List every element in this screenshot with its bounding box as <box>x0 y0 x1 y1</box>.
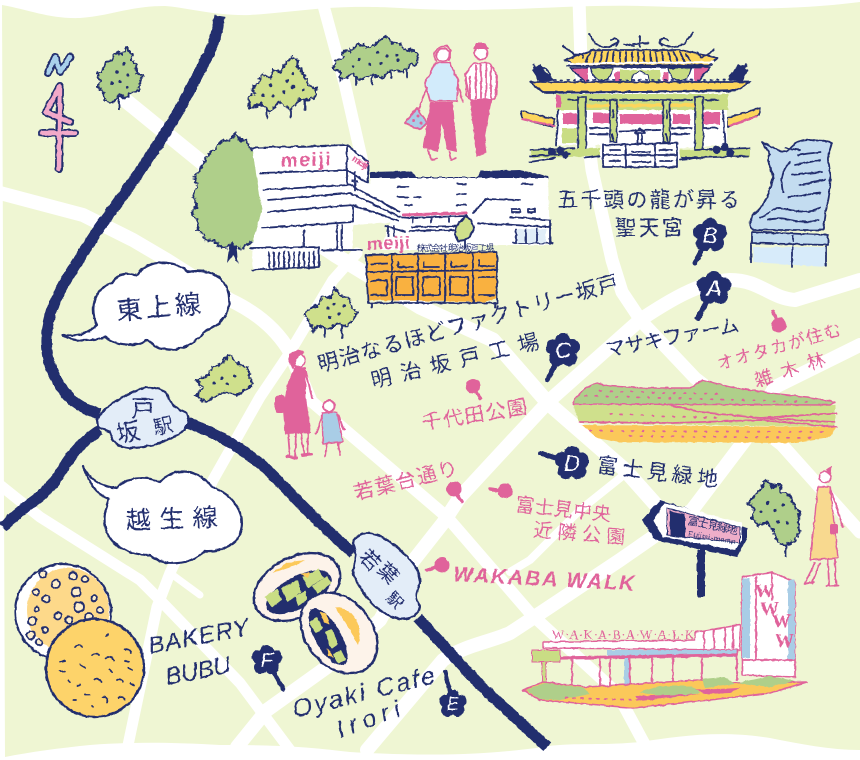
temple: Seitengu <box>521 32 760 167</box>
man with hat <box>465 43 497 157</box>
compass: north arrow <box>42 57 75 169</box>
marker F <box>252 645 283 689</box>
station: Sakado: 戸 <box>131 396 155 423</box>
pink pin: Wakaba Walk <box>427 558 450 572</box>
marker E: E <box>447 694 460 714</box>
station: Sakado: 坂 <box>114 418 143 449</box>
station: Sakado <box>97 387 188 449</box>
label: Fujimi chuo: 富士見中央 <box>514 494 612 526</box>
building name: W·A·K·A·B·A·W·A·L·K <box>552 627 695 642</box>
right building <box>370 170 552 245</box>
orange factory panel <box>366 252 497 308</box>
illustration: parents and child <box>275 350 344 458</box>
tree 3 <box>333 36 418 85</box>
woman with bag <box>405 46 463 160</box>
callout: Ogose Line <box>83 466 242 563</box>
temple wall and columns <box>556 93 728 160</box>
callout: Tojo Line <box>63 263 229 350</box>
station: Wakaba: 葉 <box>372 558 403 589</box>
label: Fujimi green area: 富士見緑地 <box>595 454 719 492</box>
temple lower roof <box>530 80 750 93</box>
railway lines <box>3 16 547 747</box>
couple walking <box>405 43 497 160</box>
small tree in factory <box>455 215 474 248</box>
tree 2 <box>248 57 316 118</box>
meiji sign side: meiji <box>349 153 371 172</box>
main meiji block <box>250 145 405 270</box>
station: Sakado: 駅 <box>151 414 175 440</box>
signboard: Fujimi green area <box>642 500 747 597</box>
tree 7 <box>196 355 253 402</box>
label: neighborhood park: 近隣公園 <box>533 519 626 549</box>
illustration: round bread top <box>15 564 111 660</box>
marker C <box>546 333 580 380</box>
illustration: woodland field <box>573 380 837 443</box>
pink pin: Wakabadai street <box>446 482 462 502</box>
temple upper frieze <box>570 67 710 83</box>
marker C: C <box>555 338 571 363</box>
stone dragon lion statue <box>750 140 832 267</box>
marker E <box>440 672 466 716</box>
station: Wakaba: 駅 <box>382 589 406 613</box>
label: Irori: Irori <box>333 695 405 744</box>
ground <box>523 676 807 708</box>
illustration: round bread bottom <box>46 619 144 717</box>
label: Oyaki Cafe: Oyaki Cafe <box>290 661 438 724</box>
child <box>316 400 344 456</box>
label: Masaki Farm: マサキファーム <box>604 314 741 362</box>
pink pin: woodland <box>772 311 786 332</box>
station: Wakaba <box>353 533 420 619</box>
tower: W <box>755 581 774 602</box>
tower: W <box>760 599 779 620</box>
marker B: B <box>703 223 717 248</box>
marker D <box>540 446 589 479</box>
signboard: Fujimi green area: 富士見緑地 <box>686 514 739 538</box>
label: five thousand dragons: 五千頭の龍が昇る <box>557 189 740 212</box>
label: Wakaba Walk: WAKABA WALK <box>453 563 637 596</box>
temple base <box>530 143 750 162</box>
tower: W <box>772 611 791 632</box>
mother <box>275 350 312 458</box>
side eaves <box>521 108 760 127</box>
marker A: A <box>705 276 721 301</box>
tree 6 <box>305 288 358 338</box>
tree 1 <box>97 47 143 109</box>
marker A <box>697 271 731 318</box>
canopy <box>532 625 740 700</box>
illustration: oyaki dumpling top <box>242 539 352 635</box>
factory sign small text: 株式会社 明治坂戸工場 <box>417 243 494 253</box>
callout: Tojo Line: 東上線 <box>115 289 202 326</box>
trees <box>97 36 800 556</box>
tower: W <box>775 631 794 652</box>
temple altar box <box>603 128 677 167</box>
label: Meiji Sakado factory: 明治坂戸工場 <box>369 330 541 393</box>
label: goshawk woodland line 1: オオタカが住む <box>715 320 843 374</box>
marker B <box>693 218 727 263</box>
label: Bubu: BUBU <box>163 652 234 691</box>
meiji sign lower: meiji <box>366 233 410 254</box>
callout: Ogose Line: 越生線 <box>125 504 218 535</box>
label: Meiji Naruhodo Factory Sakado: 明治なるほどファクトリー坂戸 <box>315 272 621 377</box>
signboard: Fujimi green area: Fujimi-mamn <box>688 529 736 546</box>
label: goshawk woodland line 2: 雑木林 <box>752 349 828 391</box>
temple upper roof <box>565 50 718 66</box>
pink pin: Chiyoda park <box>466 378 480 398</box>
pink pin: Fujimi park <box>490 484 512 498</box>
hatch box <box>250 247 319 270</box>
tree 4: large tree by the factory <box>192 133 268 264</box>
arrow shape <box>42 86 75 169</box>
tower <box>742 572 795 677</box>
marker F: F <box>261 650 275 672</box>
illustration: oyaki dumpling bottom <box>285 577 393 689</box>
temple roof dragons <box>532 32 748 82</box>
woman with yellow coat <box>804 466 843 586</box>
meiji sign upper: meiji <box>280 149 331 172</box>
illustration: Wakaba Walk building <box>523 572 807 708</box>
pedestal <box>751 232 828 267</box>
marker D: D <box>564 451 580 476</box>
label: Wakabadai street: 若葉台通り <box>352 457 460 505</box>
meiji factory building <box>250 145 552 308</box>
station: Wakaba: 若 <box>354 545 385 576</box>
N letter <box>48 57 70 73</box>
centre building band <box>380 210 478 250</box>
tree 8 <box>748 479 800 556</box>
label: Chiyoda park: 千代田公園 <box>420 396 528 435</box>
label: Bakery: BAKERY <box>146 614 253 660</box>
label: Seitengu: 聖天宮 <box>615 217 683 240</box>
